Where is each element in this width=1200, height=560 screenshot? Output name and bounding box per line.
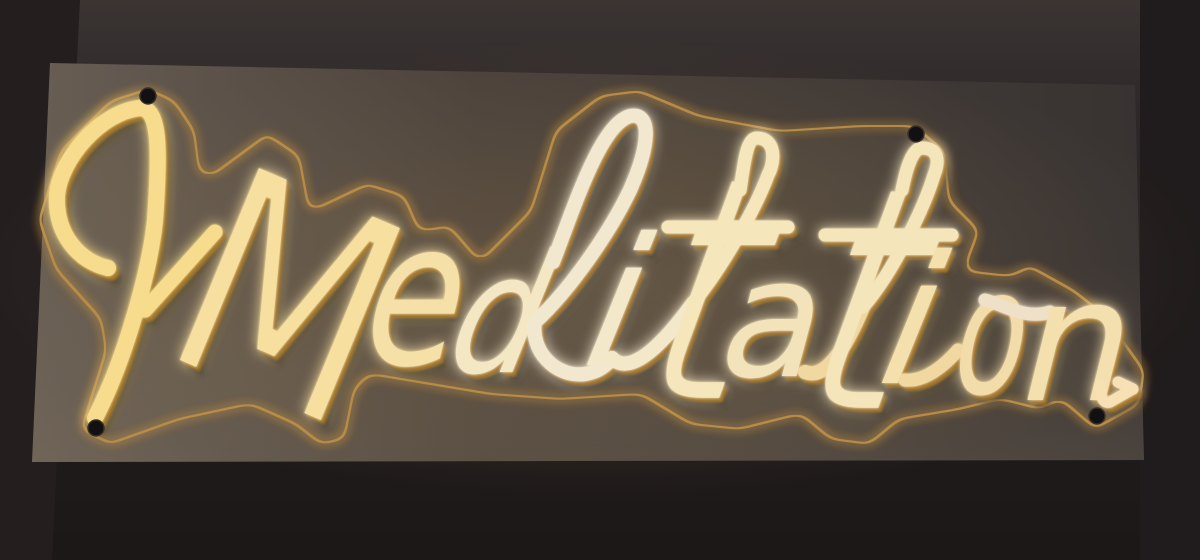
letter i: i: [553, 200, 686, 407]
letter i: i: [848, 218, 981, 425]
right wall shadow: [1140, 0, 1200, 560]
screw: top left: [140, 88, 156, 104]
letter M: M: [129, 105, 445, 495]
flourish: second t loop and crossbar: [825, 148, 952, 307]
flourish: M loop and long stem: [57, 108, 158, 418]
screw: bottom right: [1089, 408, 1105, 424]
flourish: n tail: [1100, 382, 1133, 402]
mounting screws: [88, 88, 1105, 436]
neon lettering: Meditation: [57, 105, 1159, 495]
letter e: e: [342, 179, 496, 412]
flourish: a to t connector: [805, 307, 863, 373]
letter o: o: [937, 230, 1051, 435]
screw: bottom left: [88, 420, 104, 436]
letter t: t: [753, 115, 996, 488]
letter d: d: [420, 219, 587, 411]
letter a: a: [701, 224, 852, 416]
flourish: t loop and crossbar: [668, 138, 788, 303]
letter n: n: [1002, 242, 1159, 440]
flourish: i to o connector: [905, 350, 958, 380]
clear acrylic backing outline: [38, 88, 1145, 445]
letter t: t: [594, 105, 837, 478]
backing panel: [32, 63, 1144, 462]
panel lower light: [32, 63, 1144, 462]
left wall column: [0, 0, 80, 560]
screw: top right: [908, 126, 924, 142]
flourish: o to n connector: [985, 300, 1050, 314]
flourish: d ascender loop: [534, 116, 646, 374]
flourish: M entry stroke: [145, 232, 215, 310]
flourish: i to t connector: [612, 303, 693, 364]
